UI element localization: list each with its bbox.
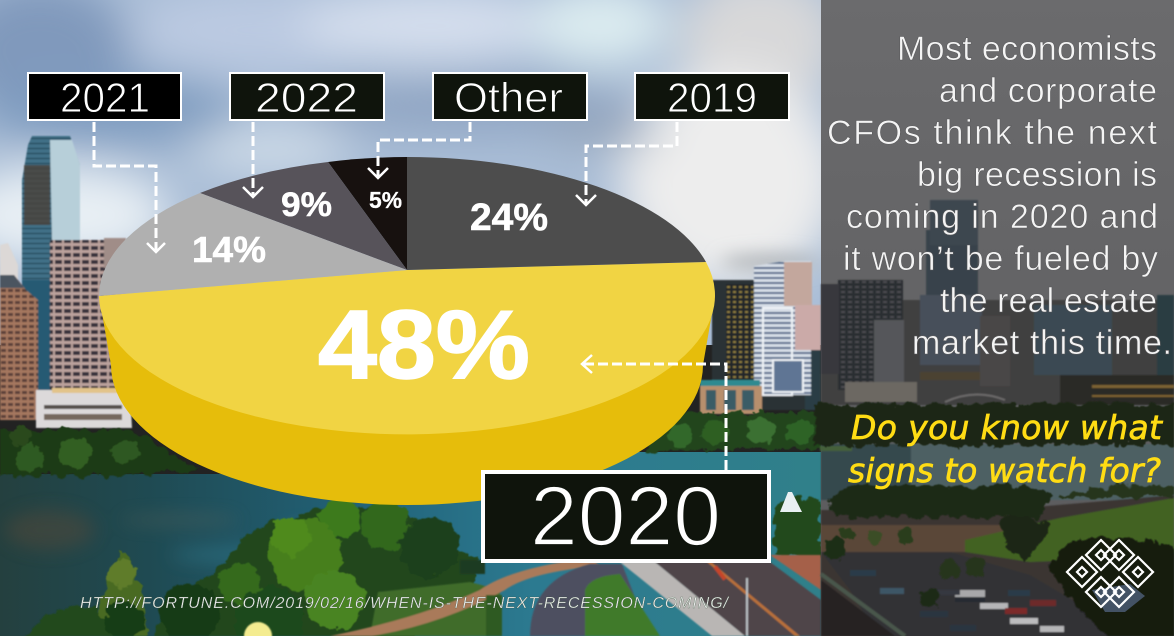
church on the far bank bbox=[780, 492, 802, 512]
value 48%: 48% bbox=[318, 290, 530, 399]
yellow call to action bbox=[848, 408, 1163, 490]
connector 2019 bbox=[576, 122, 677, 205]
headline text block: Most economists bbox=[897, 30, 1157, 68]
slice: Other 5% bbox=[328, 157, 407, 270]
left skyline buildings bbox=[0, 136, 132, 428]
label 2019: 2019 bbox=[667, 74, 757, 121]
headline text block: market this time. bbox=[912, 324, 1172, 362]
yellow call to action: signs to watch for? bbox=[848, 451, 1161, 490]
label 2022 bbox=[230, 73, 384, 121]
panel ground bbox=[821, 495, 1174, 636]
panel river bbox=[821, 444, 1174, 500]
slice: 2021 14% bbox=[99, 193, 407, 296]
sky bbox=[0, 0, 840, 345]
foreground road and bridge bbox=[530, 555, 821, 636]
panel road and car park bbox=[821, 552, 1140, 636]
right skyline buildings bbox=[700, 261, 821, 414]
value 9%: 9% bbox=[281, 186, 332, 224]
headline text block: big recession is bbox=[917, 156, 1157, 194]
headline text block bbox=[827, 30, 1172, 362]
right text panel background bbox=[815, 0, 1174, 636]
park lawn and path bbox=[244, 558, 600, 636]
river bbox=[0, 452, 821, 636]
headline text block: and corporate bbox=[939, 72, 1157, 110]
label 2021: 2021 bbox=[60, 74, 150, 121]
value 5%: 5% bbox=[369, 187, 402, 213]
connector 2020 bbox=[582, 355, 726, 470]
label 2019 bbox=[635, 73, 789, 121]
panel park lawn bbox=[965, 498, 1174, 562]
label 2020: 2020 bbox=[530, 469, 721, 563]
value 24%: 24% bbox=[470, 197, 548, 239]
value 14%: 14% bbox=[192, 229, 266, 270]
headline text block: coming in 2020 and bbox=[846, 198, 1158, 236]
panel parked cars bbox=[850, 570, 1064, 632]
3D pie chart bbox=[99, 157, 715, 505]
label Other bbox=[433, 73, 587, 121]
slice: 2022 9% bbox=[200, 162, 407, 270]
headline text block: CFOs think the next bbox=[827, 114, 1158, 152]
label Other: Other bbox=[454, 74, 563, 121]
slice: 2019 24% bbox=[407, 157, 706, 270]
panel bus shelter behind logo bbox=[1092, 584, 1145, 612]
connector 2022 bbox=[243, 122, 263, 197]
source url: HTTP://FORTUNE.COM/2019/02/16/WHEN-IS-THE-NEXT-RECESSION-COMING/ bbox=[80, 595, 730, 612]
icon: endless knot logo bbox=[1067, 540, 1153, 607]
foreground trees and park bbox=[20, 498, 478, 636]
connector Other bbox=[368, 122, 470, 178]
headline text block: it won’t be fueled by bbox=[843, 240, 1158, 278]
shoreline trees bbox=[0, 412, 825, 560]
pie side wall bbox=[99, 296, 715, 505]
background photo: city skyline and river bbox=[0, 0, 840, 636]
headline text block: the real estate bbox=[940, 282, 1157, 320]
panel skyline bbox=[821, 200, 1174, 405]
label 2022: 2022 bbox=[255, 74, 358, 121]
label 2020 bbox=[483, 469, 769, 563]
label 2021 bbox=[28, 73, 181, 121]
panel trees bbox=[815, 404, 1174, 636]
river ripples bbox=[5, 510, 380, 561]
slice: 2020 48% bbox=[99, 262, 715, 434]
connector 2021 bbox=[94, 122, 165, 252]
yellow call to action: Do you know what bbox=[851, 408, 1163, 447]
